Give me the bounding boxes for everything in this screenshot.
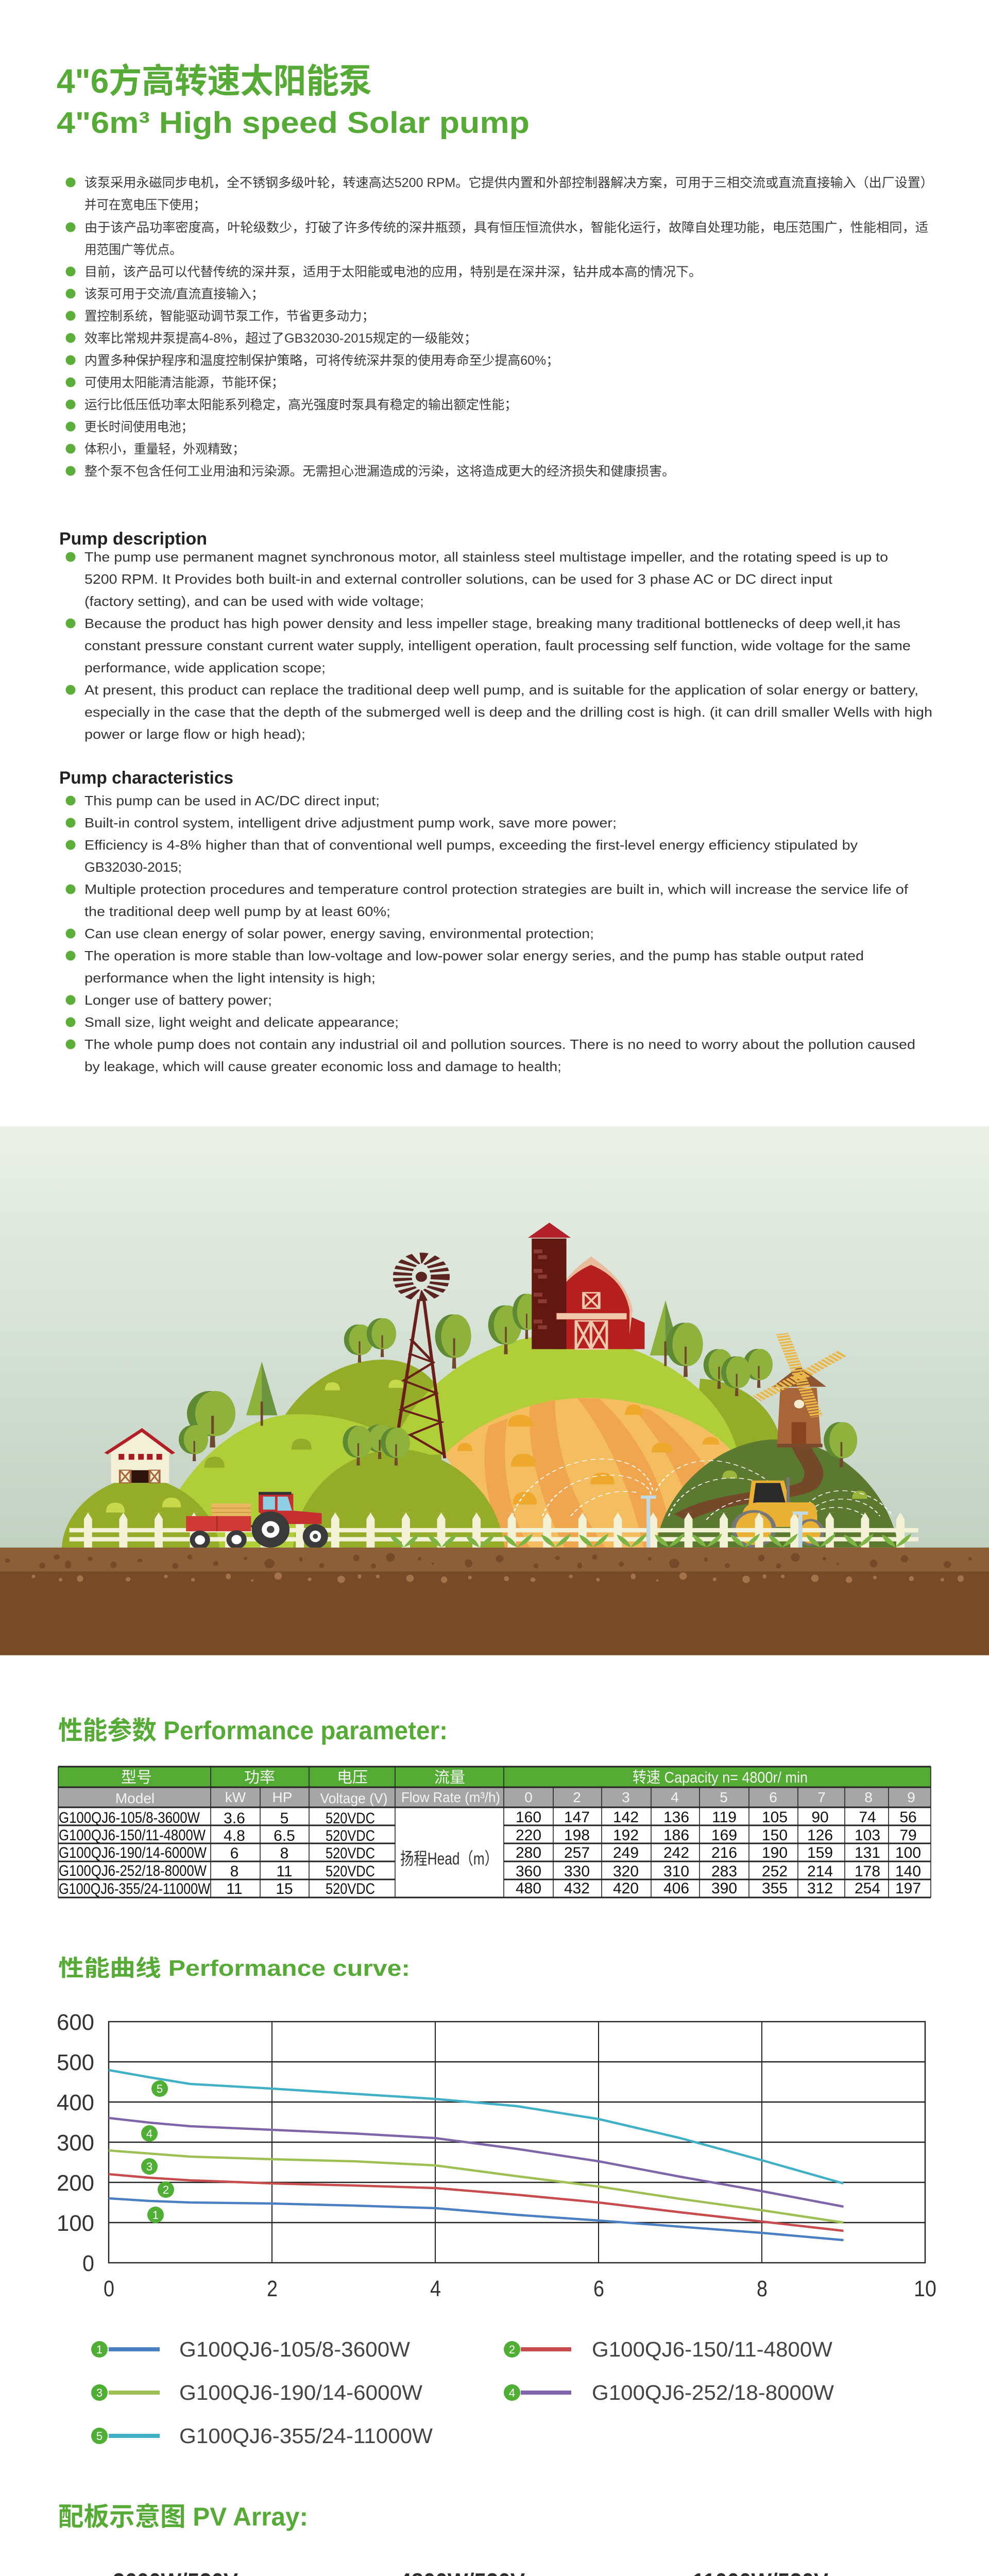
legend item 2: G100QJ6-150/11-4800W: [592, 2337, 832, 2361]
crop seedlings: [390, 1533, 911, 1547]
icon: brown windmill: [757, 1333, 842, 1447]
text block: Pump description: The pump use permanent magnet synchronous motor, all stainless steel multistage impeller, and the rotating speed is up to: [84, 549, 888, 565]
line chart: performance curve: [57, 2010, 936, 2301]
table body: head values: 312: [807, 1880, 833, 1897]
text block: Pump characteristics: Longer use of battery power;: [84, 992, 272, 1008]
text block: Pump characteristics: [59, 768, 915, 1074]
table body: head values: 257: [564, 1844, 590, 1861]
text block: Pump description: performance, wide application scope;: [84, 660, 326, 675]
table body: head values: 190: [762, 1844, 788, 1861]
curve number badges: [141, 2080, 174, 2223]
table subheader row: 5: [720, 1789, 728, 1805]
table body: model rows: 4.8: [224, 1827, 245, 1844]
table body: head values: 160: [516, 1809, 541, 1826]
table header row: 电压: [337, 1769, 368, 1786]
text block: Chinese feature list: 该泵采用永磁同步电机，全不锈钢多级叶轮，转速高达5200 RPM。它提供内置和外部控制器解决方案，可用于三相交流或直流直接输入（出厂设置）: [84, 176, 933, 190]
legend item 3: G100QJ6-190/14-6000W: [179, 2381, 422, 2404]
table body: head values: 432: [564, 1880, 590, 1897]
table body: model rows: 6: [230, 1845, 238, 1862]
table body: head values: 105: [762, 1809, 788, 1826]
text block: Chinese feature list: 体积小，重量轻，外观精致；: [84, 442, 245, 456]
table subheader row: 6: [769, 1789, 777, 1805]
table header row: 转速 Capacity n= 4800r/ min: [633, 1769, 808, 1786]
text block: Pump description: [59, 529, 932, 742]
text block: Chinese feature list: 更长时间使用电池；: [84, 420, 193, 434]
text block: Chinese feature list: 整个泵不包含任何工业用油和污染源。无需担心泄漏造成的污染，这将造成更大的经济损失和健康损害。: [84, 464, 675, 479]
table body: model rows: 520VDC: [326, 1810, 375, 1827]
icon: trees: [179, 1294, 857, 1467]
legend item 1: G100QJ6-105/8-3600W: [179, 2337, 410, 2361]
table body: head values: 254: [855, 1880, 880, 1897]
y axis labels: 0: [82, 2251, 94, 2276]
text block: Chinese feature list: 该泵可用于交流/直流直接输入；: [84, 287, 264, 301]
table header row: 流量: [434, 1769, 465, 1786]
y axis labels: 600: [57, 2010, 94, 2035]
icon: lattice windmill: [399, 1258, 445, 1458]
table body: head values: 280: [516, 1844, 541, 1861]
soil layers: [0, 1548, 989, 1655]
curve number badges: 5: [157, 2082, 163, 2095]
table subheader row: Model: [115, 1790, 155, 1806]
text block: Pump description: constant pressure constant current water supply, intelligent operation, fault processing self function, wide voltage for the same: [84, 638, 911, 653]
table body: model rows: G100QJ6-105/8-3600W: [59, 1809, 200, 1826]
table subheader row: 8: [864, 1789, 873, 1805]
curve 5: [109, 2070, 844, 2183]
table subheader row: 7: [817, 1789, 826, 1805]
text block: Pump characteristics: by leakage, which will cause greater economic loss and damage to health;: [84, 1059, 561, 1074]
text block: Chinese feature list: 内置多种保护程序和温度控制保护策略，可将传统深井泵的使用寿命至少提高60%；: [84, 353, 559, 368]
x axis labels: 6: [593, 2276, 604, 2301]
table body: head values: 103: [855, 1827, 880, 1844]
heading: performance curve: 性能曲线 Performance curve:: [58, 1956, 410, 1981]
text block: Chinese feature list: 目前，该产品可以代替传统的深井泵，适用于太阳能或电池的应用，特别是在深井深，钻井成本高的情况下。: [84, 265, 702, 279]
table body: head values: 90: [811, 1809, 829, 1826]
x axis labels: 4: [430, 2276, 441, 2301]
table body: model rows: 8: [230, 1863, 238, 1880]
curve 4: [109, 2118, 844, 2207]
text block: Pump description: Pump description: [59, 529, 207, 549]
table body: head values: 79: [899, 1827, 917, 1844]
text block: Pump characteristics: Can use clean energy of solar power, energy saving, environmental protection;: [84, 926, 594, 941]
table body: model rows: G100QJ6-150/11-4800W: [59, 1827, 206, 1844]
legend item 3: 3: [96, 2386, 103, 2399]
table body: head values: [516, 1809, 921, 1897]
table subheader row: kW: [225, 1789, 246, 1805]
table subheader row: Flow Rate (m³/h): [401, 1789, 500, 1805]
text block: Pump characteristics: Small size, light weight and delicate appearance;: [84, 1014, 399, 1030]
y axis labels: 500: [57, 2050, 94, 2075]
icon: red tractor with trailer: [186, 1492, 328, 1549]
text block: Pump characteristics: The operation is more stable than low-voltage and low-power solar energy series, and the pump has stable output rated: [84, 948, 864, 963]
table body: head values: 186: [663, 1827, 689, 1844]
table body: head values: 192: [613, 1827, 639, 1844]
chart legend: [91, 2337, 834, 2448]
table header row: 功率: [244, 1769, 275, 1786]
text block: Pump characteristics: GB32030-2015;: [84, 859, 182, 875]
y axis labels: 300: [57, 2130, 94, 2156]
table subheader row: [58, 1788, 931, 1807]
table body: head values: 119: [712, 1809, 737, 1826]
heading: PV array: 配板示意图 PV Array:: [58, 2502, 308, 2531]
text block: Chinese feature list: 由于该产品功率密度高，叶轮级数少，打破了许多传统的深井瓶颈，具有恒压恒流供水，智能化运行，故障自处理功能，电压范围广，性能相同，适: [84, 221, 928, 235]
table body: head values: 159: [807, 1844, 833, 1861]
table body: head values: 150: [762, 1827, 788, 1844]
table body: model rows: 3.6: [224, 1810, 245, 1827]
table subheader row: 0: [524, 1789, 533, 1805]
table body: head values: 136: [663, 1809, 689, 1826]
icon: red barn and silo: [528, 1223, 644, 1349]
table body: head values: 310: [663, 1863, 689, 1880]
table body: head values: 390: [711, 1880, 737, 1897]
sprinkler poles: [641, 1496, 808, 1548]
icon: farmhouse: [106, 1430, 174, 1483]
table body: head values: 242: [663, 1844, 689, 1861]
table body: head values: 131: [855, 1844, 880, 1861]
table body: head values: 56: [899, 1809, 917, 1826]
text block: Pump characteristics: Pump characteristics: [59, 768, 233, 788]
curve 2: [109, 2174, 844, 2231]
table body: head values: 198: [564, 1827, 590, 1844]
heading: performance parameter: 性能参数 Performance parameter:: [58, 1716, 448, 1745]
table body: head values: 420: [613, 1880, 639, 1897]
table body: head values: 220: [516, 1827, 541, 1844]
table subheader row: 3: [622, 1789, 630, 1805]
legend item 4: 4: [509, 2386, 515, 2399]
text block: Chinese feature list: 可使用太阳能清洁能源，节能环保；: [84, 376, 284, 390]
table body: model rows: G100QJ6-190/14-6000W: [59, 1844, 207, 1861]
table subheader row: HP: [272, 1789, 292, 1805]
table body: head values: 214: [807, 1863, 833, 1880]
table body: head values: 406: [663, 1880, 689, 1897]
table body: model rows: 8: [280, 1845, 288, 1862]
text block: Chinese feature list: 运行比低压低功率太阳能系列稳定，高光强度时泵具有稳定的输出额定性能；: [84, 398, 517, 412]
table body: head values: 178: [855, 1863, 880, 1880]
x axis labels: 10: [914, 2276, 936, 2301]
title: 4"6方高转速太阳能泵: [57, 62, 372, 100]
table body: model rows: 15: [276, 1880, 293, 1897]
table body: model rows: 11: [276, 1863, 293, 1880]
text block: Pump characteristics: Multiple protection procedures and temperature control protection strategies are built in, which will increase the service life of: [84, 882, 909, 897]
table body: model rows: 520VDC: [326, 1863, 375, 1880]
title: 4"6m³ High speed Solar pump: [57, 106, 530, 140]
text block: Chinese feature list: 用范围广等优点。: [84, 243, 182, 257]
text block: Pump characteristics: Built-in control system, intelligent drive adjustment pump work, save more power;: [84, 815, 617, 831]
table subheader row: Voltage (V): [320, 1790, 387, 1806]
y axis labels: [57, 2010, 94, 2276]
table body: head values: 355: [762, 1880, 788, 1897]
table body: head values: 249: [613, 1844, 639, 1861]
illustration: farm scene: [0, 1126, 989, 1655]
table body: head values: 126: [807, 1827, 833, 1844]
table body: head values: 147: [564, 1809, 590, 1826]
text block: Pump description: power or large flow or high head);: [84, 726, 305, 742]
legend item 5: G100QJ6-355/24-11000W: [179, 2424, 433, 2448]
table body: head values: 197: [895, 1880, 921, 1897]
curve number badges: 3: [146, 2160, 152, 2173]
legend item 2: 2: [509, 2343, 515, 2356]
y axis labels: 200: [57, 2171, 94, 2196]
table subheader row: 4: [671, 1789, 679, 1805]
curve number badges: 1: [152, 2209, 159, 2222]
table body: head values: 142: [613, 1809, 639, 1826]
y axis labels: 400: [57, 2090, 94, 2115]
fence: [70, 1513, 918, 1548]
table body: head values: 320: [613, 1863, 639, 1880]
table body: head values: 140: [895, 1863, 921, 1880]
text block: Pump description: 5200 RPM. It Provides both built-in and external controller solutions, can be used for 3 phase AC or DC direct input: [84, 571, 833, 587]
table body: head values: 169: [711, 1827, 737, 1844]
table header row: [58, 1767, 931, 1787]
x axis labels: [104, 2276, 936, 2301]
title: [57, 62, 530, 140]
table body: model rows: 5: [280, 1810, 288, 1827]
text block: Pump description: At present, this product can replace the traditional deep well pump, and is suitable for the application of solar energy or battery,: [84, 682, 918, 698]
legend item 4: G100QJ6-252/18-8000W: [592, 2381, 834, 2404]
text block: Pump characteristics: performance when the light intensity is high;: [84, 970, 376, 986]
curve number badges: 4: [146, 2127, 152, 2140]
table body: head values: 330: [564, 1863, 590, 1880]
x axis labels: 0: [104, 2276, 114, 2301]
text block: Pump description: Because the product has high power density and less impeller stage, breaking many traditional bottlenecks of deep well,it has: [84, 616, 900, 631]
text block: Pump characteristics: Efficiency is 4-8% higher than that of conventional well pumps, exceeding the first-level energy efficiency stipulated by: [84, 837, 858, 853]
legend item 5: 5: [96, 2430, 103, 2443]
table body: head values: 74: [859, 1809, 876, 1826]
legend item 1: 1: [96, 2343, 103, 2356]
text block: Pump characteristics: the traditional deep well pump by at least 60%;: [84, 904, 390, 919]
table body: model rows: G100QJ6-355/24-11000W: [59, 1880, 211, 1897]
text block: Pump characteristics: The whole pump does not contain any industrial oil and pollution sources. There is no need to worry about the pollution caused: [84, 1037, 915, 1052]
text block: Pump description: (factory setting), and can be used with wide voltage;: [84, 594, 424, 609]
curve number badges: 2: [163, 2183, 169, 2196]
table body: head values: 100: [895, 1844, 921, 1861]
icon: yellow tractor: [734, 1477, 823, 1546]
table body: head values: 216: [711, 1844, 737, 1861]
curve 1: [109, 2198, 844, 2240]
table body: model rows: 520VDC: [326, 1880, 375, 1897]
table body: model rows: 11: [226, 1880, 243, 1897]
table subheader row: 2: [573, 1789, 581, 1805]
x axis labels: 2: [267, 2276, 278, 2301]
curve 3: [109, 2150, 844, 2223]
table body: head values: 283: [711, 1863, 737, 1880]
chart grid: [109, 2022, 925, 2263]
table: performance parameters: [58, 1767, 931, 1897]
sprinkler spray arcs: [512, 1459, 893, 1520]
table body: model rows: 520VDC: [326, 1827, 375, 1844]
y axis labels: 100: [57, 2211, 94, 2236]
table body: model rows: [59, 1809, 498, 1897]
x axis labels: 8: [757, 2276, 768, 2301]
text block: Pump characteristics: This pump can be used in AC/DC direct input;: [84, 793, 380, 808]
text block: Chinese feature list: 效率比常规井泵提高4-8%，超过了GB32030-2015规定的一级能效；: [84, 331, 477, 346]
table subheader row: 9: [907, 1789, 915, 1805]
text block: Chinese feature list: [66, 176, 933, 479]
table body: model rows: 6.5: [274, 1827, 295, 1844]
text block: Chinese feature list: 置控制系统，智能驱动调节泵工作，节省更多动力；: [84, 309, 374, 324]
table body: head values: 360: [516, 1863, 541, 1880]
text block: Chinese feature list: 并可在宽电压下使用；: [84, 198, 206, 212]
table body: head values: 252: [762, 1863, 788, 1880]
text block: Pump description: especially in the case that the depth of the submerged well is deep and the drilling cost is high. (it can drill smaller Wells with high: [84, 704, 932, 720]
table body: model rows: G100QJ6-252/18-8000W: [59, 1862, 207, 1879]
table body: model rows: 扬程Head（m）: [400, 1849, 498, 1868]
table body: model rows: 520VDC: [326, 1845, 375, 1862]
table body: head values: 480: [516, 1880, 541, 1897]
table grid: [58, 1767, 931, 1897]
table header row: 型号: [121, 1769, 152, 1786]
